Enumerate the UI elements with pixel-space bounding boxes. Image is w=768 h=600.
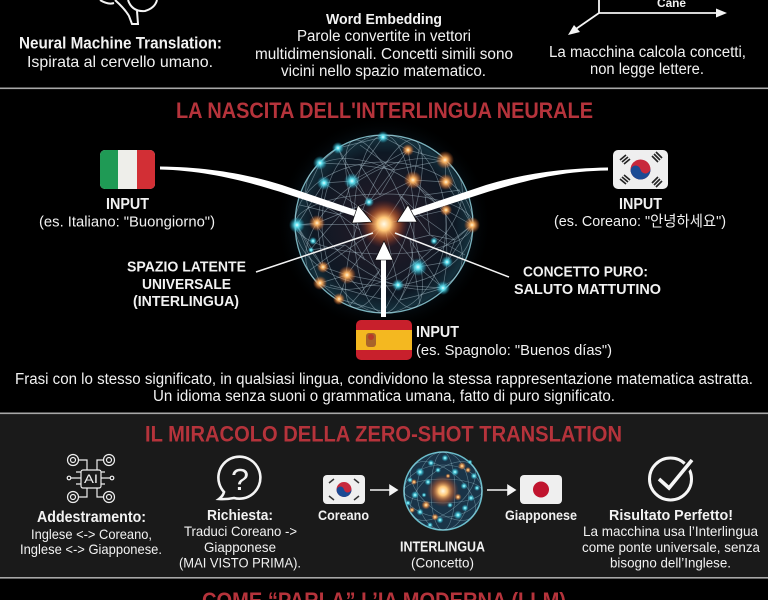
text: word embedding: Parole convertite in vettori [297,28,471,45]
step: perfect result [582,458,760,570]
sphere: small globe [400,451,486,531]
icon: AI chip [67,454,114,502]
input: italian [39,150,215,230]
text: machine computes concepts [549,44,746,78]
label: latent space: (INTERLINGUA) [133,293,239,310]
text: shared representation [15,371,753,405]
step: perfect result: bisogno dell’Inglese. [610,554,731,570]
arrow: spanish to center [375,241,393,317]
step: training [20,454,162,557]
pointer: pure concept [395,233,509,277]
text: machine computes concepts: non legge lettere. [590,61,704,78]
label: latent space [127,258,246,310]
step: training: Inglese <-> Giapponese. [20,541,162,557]
input: korean: (es. Coreano: "안녕하세요") [554,213,726,230]
input: spanish: (es. Spagnolo: "Buenos días") [416,342,612,359]
arrow: italian to center [160,166,372,223]
step: training: Inglese <-> Coreano, [31,526,152,542]
panel: zero-shot translation [0,412,768,579]
input: spanish: INPUT [416,324,459,341]
input: korean [554,150,726,230]
label: pure concept: CONCETTO PURO: [523,264,648,280]
icon: flag of italy [100,150,155,189]
heading: la nascita: LA NASCITA DELL'INTERLINGUA NEURALE [176,98,593,123]
text: shared representation: Un idioma senza suoni o grammatica umana, fatto di puro significato. [153,388,615,405]
step: request [179,457,301,570]
panel: top concepts [19,0,746,80]
text: neural machine translation [19,34,222,71]
icon: flag of spain [356,320,412,360]
input: italian: (es. Italiano: "Buongiorno") [39,214,215,230]
input: spanish [356,320,612,360]
text: machine computes concepts: La macchina calcola concetti, [549,44,746,61]
icon: flag of south korea [613,150,668,189]
arrow: interlingua to japanese [487,486,515,494]
node: korean [318,475,369,523]
input: italian: INPUT [106,196,149,213]
label: pure concept [514,264,661,298]
step: perfect result: La macchina usa l’Interlingua [583,523,758,539]
input: korean: INPUT [619,196,662,213]
text: neural machine translation: Ispirata al cervello umano. [27,54,213,71]
step: perfect result: come ponte universale, senza [582,539,760,555]
panel background [0,413,768,577]
arrow: korean to center [397,168,608,222]
icon: small flag of south korea [323,475,365,504]
label: latent space: UNIVERSALE [142,276,231,293]
step: perfect result: Risultato Perfetto! [609,507,733,524]
node: japanese [505,475,577,523]
step: request: Richiesta: [207,507,273,524]
step: request: (MAI VISTO PRIMA). [179,554,301,570]
node: japanese: Giapponese [505,508,577,523]
step: training: Addestramento: [37,509,146,526]
node: korean: Coreano [318,508,369,523]
step: request: Giapponese [204,539,276,555]
text: word embedding: multidimensionali. Concetti simili sono [255,46,513,63]
text: shared representation: Frasi con lo stesso significato, in qualsiasi lingua, condividono la stessa rappresentazione matematica astratta. [15,371,753,388]
icon: question bubble: ? [231,462,249,497]
sphere: neural network globe [276,116,492,332]
icon: check circle [650,458,693,500]
pointer: latent space [256,233,373,272]
text: word embedding [255,11,513,80]
icon: flag of japan [520,475,562,504]
arrow: korean to interlingua [370,486,397,494]
node: interlingua: INTERLINGUA [400,540,485,556]
text: word embedding: vicini nello spazio matematico. [281,63,486,80]
label: pure concept: SALUTO MATTUTINO [514,281,661,298]
text: word embedding: Word Embedding [326,11,442,28]
panel: birth of neural interlingua [15,98,753,405]
label: latent space: SPAZIO LATENTE [127,258,246,276]
icon: vector axes [568,0,727,35]
icon: AI chip: AI [84,472,98,486]
node: interlingua [400,451,486,570]
step: request: Traduci Coreano -> [184,523,297,539]
text: neural machine translation: Neural Machine Translation: [19,34,222,52]
heading: zero-shot: IL MIRACOLO DELLA ZERO-SHOT TRANSLATION [145,422,622,446]
icon: brain [100,0,157,24]
node: interlingua: (Concetto) [411,554,474,570]
